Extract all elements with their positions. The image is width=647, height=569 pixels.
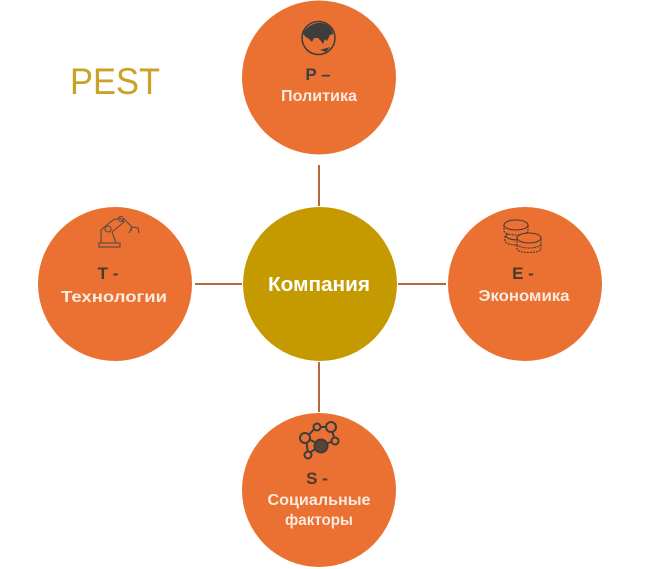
connector: top: [318, 165, 320, 206]
icon: network of people: [300, 422, 338, 458]
panel: politics: P –: [305, 65, 331, 84]
panel: technology: [38, 207, 192, 361]
title: PEST: [70, 61, 160, 102]
icon: globe: [302, 22, 335, 54]
panel: economy: [448, 207, 602, 361]
icon: robot arm: [99, 216, 139, 247]
panel: technology: T -: [98, 264, 118, 283]
center circle: company: [243, 207, 397, 361]
icon: coins: [504, 220, 541, 252]
panel: social: факторы: [285, 512, 353, 529]
panel: social: [242, 413, 396, 567]
panel: technology: Технологии: [61, 289, 167, 306]
connector: bottom: [318, 362, 320, 412]
panel: politics: Политика: [281, 88, 357, 105]
panel: social: Социальные: [268, 492, 371, 509]
connector: left: [195, 283, 242, 285]
panel: economy: Экономика: [478, 288, 570, 305]
connector: right: [398, 283, 446, 285]
panel: politics: [242, 0, 396, 154]
panel: economy: E -: [512, 264, 534, 283]
panel: social: S -: [306, 469, 328, 488]
center circle: company: Компания: [268, 274, 370, 296]
